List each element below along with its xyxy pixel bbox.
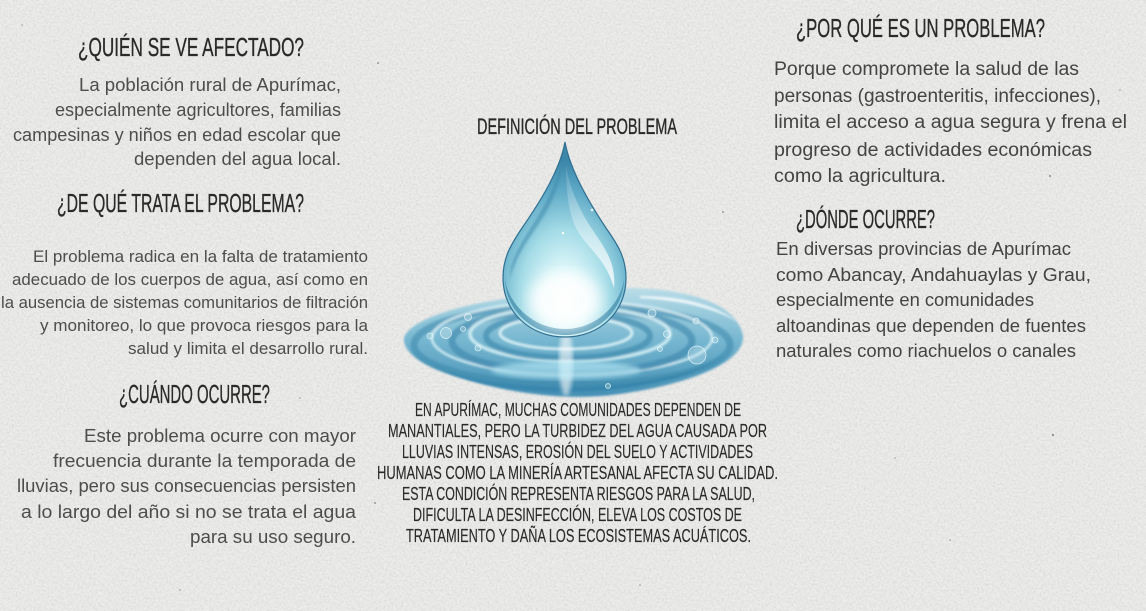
heading: dónde: ¿DÓNDE OCURRE?: [796, 204, 935, 234]
text block: cuándo: [17, 426, 357, 547]
text block: cuándo: para su uso seguro.: [190, 527, 356, 547]
panel: por qué es un problema: [774, 13, 1127, 187]
text block: center description: TRATAMIENTO Y DAÑA LOS ECOSISTEMAS ACUÁTICOS.: [406, 525, 751, 546]
text block: center description: DIFICULTA LA DESINFECCIÓN, ELEVA LOS COSTOS DE: [413, 504, 742, 525]
text block: de qué trata: y monitoreo, lo que provoca riesgos para la: [40, 317, 369, 335]
text block: cuándo: Este problema ocurre con mayor: [84, 426, 356, 446]
heading: quién: ¿QUIÉN SE VE AFECTADO?: [78, 32, 304, 62]
text block: center description: LLUVIAS INTENSAS, EROSIÓN DEL SUELO Y ACTIVIDADES: [402, 441, 753, 462]
text block: de qué trata: salud y limita el desarrollo rural.: [128, 340, 368, 358]
text block: por qué: limita el acceso a agua segura y frena el: [774, 112, 1127, 133]
panel: quién se ve afectado: [13, 32, 341, 169]
panel: dónde ocurre: [776, 204, 1091, 361]
text block: dónde: En diversas provincias de Apurímac: [776, 239, 1071, 259]
text block: quién: [13, 75, 341, 169]
text block: center description: MANANTIALES, PERO LA TURBIDEZ DEL AGUA CAUSADA POR: [388, 421, 767, 441]
text block: por qué: progreso de actividades económicas: [774, 140, 1092, 161]
text block: quién: dependen del agua local.: [134, 149, 341, 169]
heading: de qué trata: ¿DE QUÉ TRATA EL PROBLEMA?: [57, 188, 304, 218]
text block: por qué: personas (gastroenteritis, infecciones),: [774, 86, 1101, 107]
text block: dónde: altoandinas que dependen de fuentes: [776, 316, 1086, 336]
text block: quién: La población rural de Apurímac,: [79, 75, 341, 95]
text block: de qué trata: la ausencia de sistemas comunitarios de filtración: [1, 294, 368, 312]
text block: quién: campesinas y niños en edad escolar que: [13, 125, 341, 145]
text block: cuándo: lluvias, pero sus consecuencias persisten: [17, 476, 356, 496]
text block: quién: especialmente agricultores, familias: [55, 100, 341, 120]
text block: center description: HUMANAS COMO LA MINERÍA ARTESANAL AFECTA SU CALIDAD.: [377, 463, 778, 483]
text block: center description: EN APURÍMAC, MUCHAS COMUNIDADES DEPENDEN DE: [415, 400, 741, 420]
text block: de qué trata: [1, 248, 369, 358]
text block: por qué: como la agricultura.: [774, 166, 946, 187]
text block: dónde: especialmente en comunidades: [776, 290, 1034, 310]
text block: por qué: [774, 59, 1127, 187]
text block: por qué: Porque compromete la salud de las: [774, 59, 1079, 80]
text block: cuándo: a lo largo del año si no se trata el agua: [21, 502, 357, 522]
text block: dónde: como Abancay, Andahuaylas y Grau,: [776, 265, 1091, 285]
text block: de qué trata: El problema radica en la falta de tratamiento: [33, 248, 368, 266]
heading: cuándo: ¿CUÁNDO OCURRE?: [119, 379, 270, 409]
text block: center description: [377, 400, 778, 546]
text block: de qué trata: adecuado de los cuerpos de agua, así como en: [12, 271, 368, 289]
panel: cuándo ocurre: [17, 379, 357, 547]
icon: water ripples: [404, 288, 743, 397]
text block: center description: ESTA CONDICIÓN REPRESENTA RIESGOS PARA LA SALUD,: [402, 483, 755, 504]
text block: dónde: [776, 239, 1091, 361]
text block: dónde: naturales como riachuelos o canales: [776, 341, 1076, 361]
panel: de qué trata: [1, 188, 369, 358]
text block: cuándo: frecuencia durante la temporada de: [53, 451, 356, 471]
heading: definición del problema: DEFINICIÓN DEL PROBLEMA: [477, 114, 677, 139]
icon: water drop: [503, 142, 626, 337]
